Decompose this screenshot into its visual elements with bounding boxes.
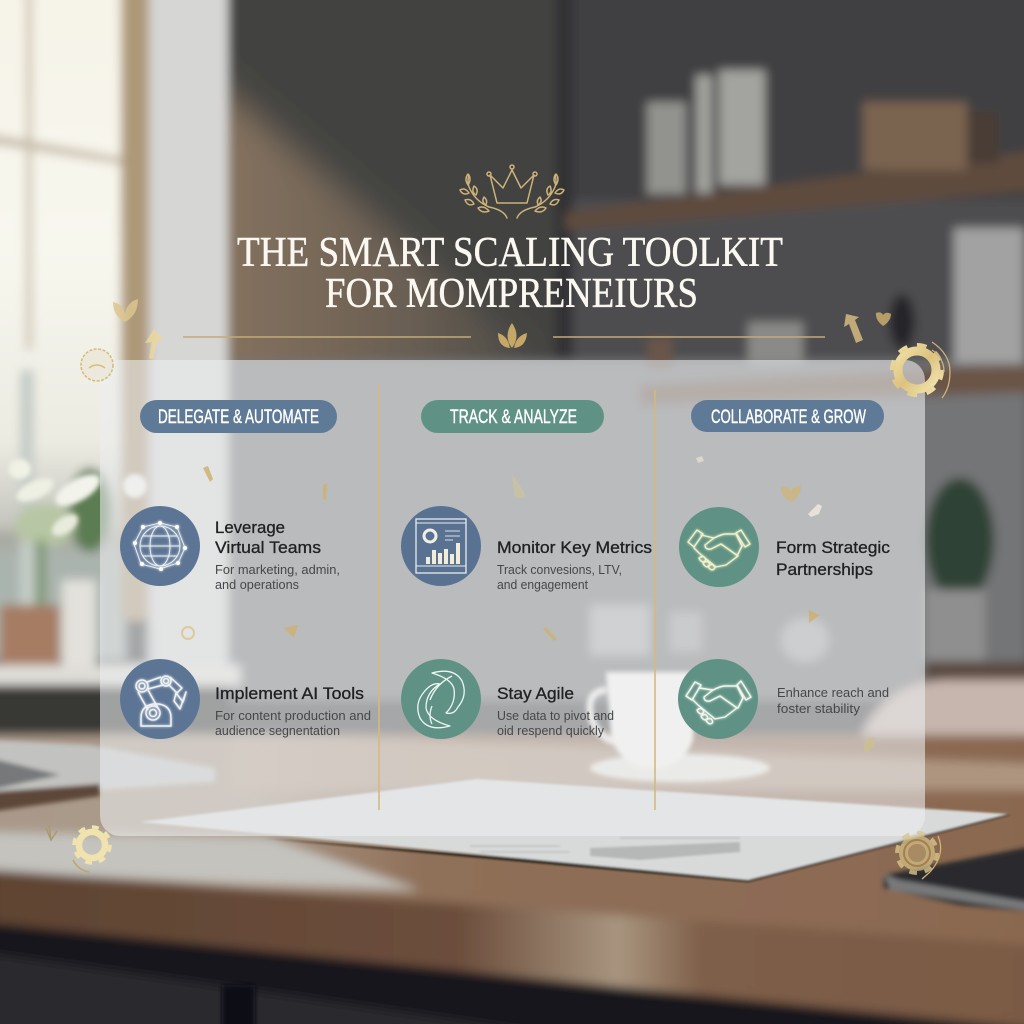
icon: handshake [679, 507, 759, 587]
text: implement ai tools: For content production and [215, 709, 371, 723]
icon: ring gear top left [81, 349, 113, 381]
title: FOR MOMPRENEIURS [325, 271, 698, 317]
paper on table [140, 779, 1010, 882]
text: stay agile [497, 685, 614, 738]
text: enhance reach and foster stability: Enhance reach and [777, 686, 889, 700]
table [0, 735, 1024, 1024]
window [0, 0, 125, 660]
text: implement ai tools: audience segnentation [215, 724, 340, 738]
text: enhance reach and foster stability: foster stability [777, 702, 861, 716]
title divider with leaf ornament [183, 323, 825, 348]
text: leverage virtual teams: and operations [215, 578, 299, 592]
pill heading: track and analyze [421, 400, 604, 433]
soft window light blobs and plant leaves [9, 459, 147, 540]
icon: dashboard [401, 506, 481, 586]
text: stay agile: Use data to pivot and [497, 709, 614, 723]
text: leverage virtual teams: For marketing, admin, [215, 563, 340, 577]
title [237, 230, 783, 317]
text: implement ai tools [215, 685, 371, 738]
text: stay agile: Stay Agile [497, 685, 574, 703]
wall shading [228, 0, 558, 380]
icon: pale gear bottom left [46, 825, 110, 872]
text: form strategic partnerships: Partnerships [776, 561, 873, 579]
icon: agile arrows swirl [401, 659, 481, 739]
plants [68, 468, 112, 552]
blurred foreground objects [0, 672, 1024, 1024]
icon: robot arm [120, 659, 200, 739]
desk objects behind [925, 662, 1024, 692]
text: enhance reach and foster stability [777, 686, 889, 716]
text: leverage virtual teams: Virtual Teams [215, 539, 321, 557]
text: form strategic partnerships [776, 539, 890, 579]
pill heading: delegate and automate: DELEGATE & AUTOMATE [158, 407, 319, 428]
icon: faded gear bottom right [897, 833, 941, 879]
pill heading: collaborate and grow [691, 400, 884, 432]
title: THE SMART SCALING TOOLKIT [237, 230, 783, 276]
pill heading: delegate and automate [140, 400, 337, 433]
text: leverage virtual teams: Leverage [215, 519, 285, 537]
frosted glass panel [100, 360, 925, 836]
column: collaborate and grow [678, 400, 890, 739]
text: form strategic partnerships: Form Strategic [776, 539, 890, 557]
text: monitor key metrics: Monitor Key Metrics [497, 539, 652, 557]
pill heading: track and analyze: TRACK & ANALYZE [450, 407, 577, 428]
icon: globe network [120, 506, 200, 586]
column dividers [379, 385, 655, 810]
shelves [565, 150, 1024, 230]
text: monitor key metrics [497, 539, 652, 592]
icon: gold gear top right [892, 342, 950, 398]
text: stay agile: oid respend quickly [497, 724, 605, 738]
icon: handshake outline [678, 659, 758, 739]
column: track and analyze [401, 400, 652, 739]
text: monitor key metrics: Track convesions, LTV, [497, 563, 622, 577]
text: monitor key metrics: and engagement [497, 578, 588, 592]
pill heading: collaborate and grow: COLLABORATE & GROW [711, 407, 866, 428]
decorative gold confetti [113, 299, 891, 753]
column: delegate and automate [120, 400, 371, 739]
text: leverage virtual teams [215, 519, 340, 592]
crown with laurel wreath icon [460, 165, 564, 218]
text: implement ai tools: Implement AI Tools [215, 685, 364, 703]
